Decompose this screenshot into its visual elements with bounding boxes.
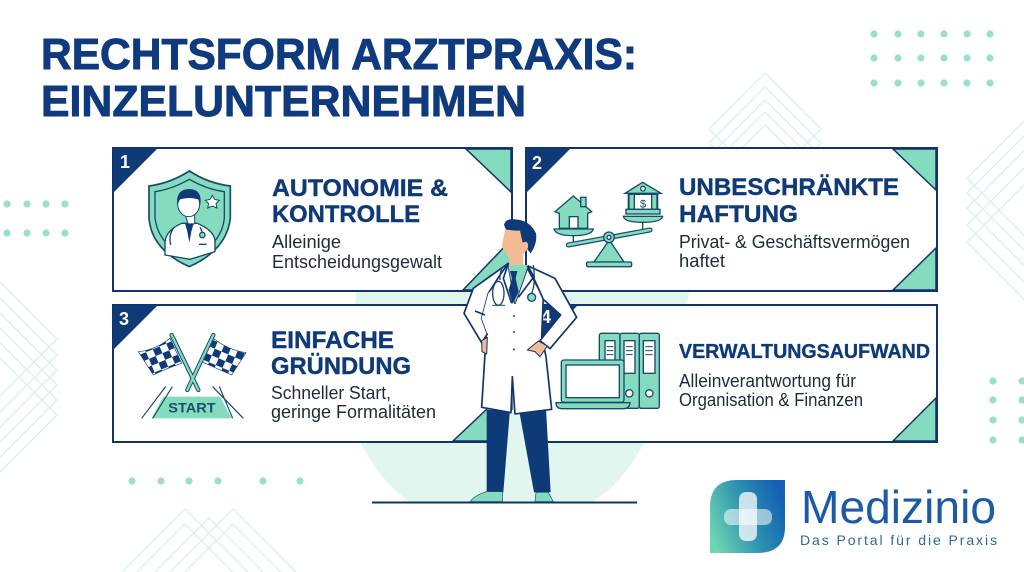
heading: [272, 175, 448, 228]
logo icon: [710, 480, 785, 553]
description: Alleinverantwortung für: [679, 371, 856, 391]
pale mint backdrop circle: [354, 285, 690, 503]
heading: [271, 327, 411, 380]
description: Alleinige: [272, 232, 341, 252]
hands: [482, 337, 547, 357]
description: [679, 371, 863, 410]
title: [41, 30, 637, 126]
description: Schneller Start,: [271, 383, 391, 403]
panel 2: Unbeschränkte Haftung: [526, 148, 937, 291]
description: [272, 232, 442, 272]
neck and head: [502, 219, 536, 275]
description: Entscheidungsgewalt: [272, 252, 442, 272]
description: geringe Formalitäten: [271, 402, 436, 422]
floor line: [372, 502, 637, 504]
number 3: 3: [119, 309, 129, 329]
stethoscope: [492, 265, 536, 350]
number 4: 4: [541, 307, 551, 327]
icon: racing flags and start line: [138, 335, 246, 418]
panel 1: Autonomie und Kontrolle: [113, 148, 512, 291]
panel 3: Einfache Gründung: [113, 305, 505, 442]
description: Organisation & Finanzen: [679, 390, 863, 410]
icon: racing flags and start line: START: [168, 400, 216, 416]
icon: shield with doctor: [149, 171, 230, 267]
doctor figure: [464, 219, 577, 502]
heading: HAFTUNG: [679, 201, 798, 228]
logo wordmark: Medizinio: [801, 481, 996, 533]
icon: binders and laptop: [556, 333, 659, 409]
heading: UNBESCHRÄNKTE: [679, 174, 899, 201]
heading: [679, 174, 899, 228]
number 2: 2: [532, 153, 542, 173]
heading: AUTONOMIE &: [272, 175, 448, 202]
title: RECHTSFORM ARZTPRAXIS:: [41, 30, 637, 79]
logo tagline: Das Portal für die Praxis: [800, 532, 997, 548]
heading: EINFACHE: [271, 327, 394, 354]
heading: GRÜNDUNG: [271, 353, 411, 380]
description: [271, 383, 436, 422]
icon: scale with house and bank: [554, 182, 663, 267]
icon: scale with house and bank: $: [640, 198, 647, 210]
title: EINZELUNTERNEHMEN: [41, 77, 526, 126]
coat: [464, 263, 577, 414]
heading: VERWALTUNGSAUFWAND: [679, 341, 930, 363]
description: [679, 232, 910, 271]
description: Privat- & Geschäftsvermögen: [679, 232, 910, 252]
description: haftet: [679, 251, 725, 271]
logo: Medizinio: [710, 480, 997, 553]
number 1: 1: [120, 152, 130, 172]
heading: KONTROLLE: [272, 201, 420, 228]
panel 4: Verwaltungsaufwand: [527, 305, 937, 442]
trousers: [487, 377, 551, 492]
shoes: [470, 492, 553, 502]
